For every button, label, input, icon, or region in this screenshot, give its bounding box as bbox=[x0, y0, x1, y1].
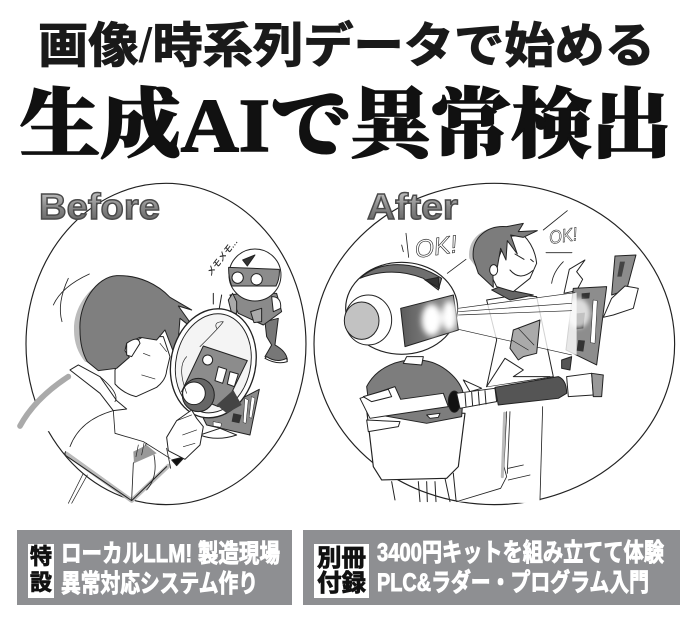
panel: special feature banner bbox=[17, 530, 292, 605]
robot small bbox=[213, 249, 287, 363]
supplement tag: 別冊 bbox=[317, 545, 366, 572]
feature tag: 特 bbox=[30, 544, 52, 569]
circle frame bbox=[314, 183, 675, 505]
person face bbox=[115, 337, 170, 397]
label: After: After bbox=[367, 186, 458, 227]
label: Before: Before bbox=[39, 186, 160, 227]
emphasis lines bbox=[402, 211, 572, 283]
circle frame bbox=[26, 183, 306, 505]
feature text line 1: ローカルLLM! 製造現場 bbox=[61, 540, 280, 568]
robot head bbox=[344, 262, 458, 354]
panel: supplement banner bbox=[303, 530, 680, 605]
robot speech: メモメモ… bbox=[204, 236, 240, 278]
person sleeve bbox=[487, 358, 550, 387]
small board with hand bbox=[603, 255, 638, 317]
robot arm bbox=[360, 357, 603, 432]
speech: OK left: OK! bbox=[413, 231, 459, 264]
person coat and legs bbox=[457, 287, 562, 503]
robot hand lower bbox=[510, 320, 540, 360]
feature tag bbox=[28, 544, 54, 598]
magnifying glass bbox=[160, 301, 266, 426]
speech: OK right: OK! bbox=[548, 223, 579, 248]
beam lines bbox=[458, 293, 575, 355]
robot body bbox=[367, 357, 482, 502]
feature text line 2: 異常対応システム作り bbox=[61, 570, 258, 598]
feature tag: 設 bbox=[30, 570, 52, 595]
person hair bbox=[53, 274, 197, 379]
supplement tag bbox=[314, 544, 369, 598]
person head bbox=[469, 223, 537, 292]
title line 2: 生成AIで異常検出 bbox=[20, 84, 672, 168]
title line 1: 画像/時系列データで始める bbox=[38, 20, 655, 73]
beams bbox=[458, 293, 577, 355]
pointing hand bbox=[564, 260, 585, 293]
panel: after illustration bbox=[314, 183, 675, 505]
glare on board bbox=[567, 298, 590, 328]
board lower right bbox=[200, 389, 259, 438]
hand bbox=[167, 410, 203, 459]
supplement tag: 付録 bbox=[317, 570, 366, 597]
person body bbox=[18, 365, 203, 503]
main circuit board bbox=[566, 287, 607, 365]
panel: before illustration bbox=[18, 183, 306, 505]
